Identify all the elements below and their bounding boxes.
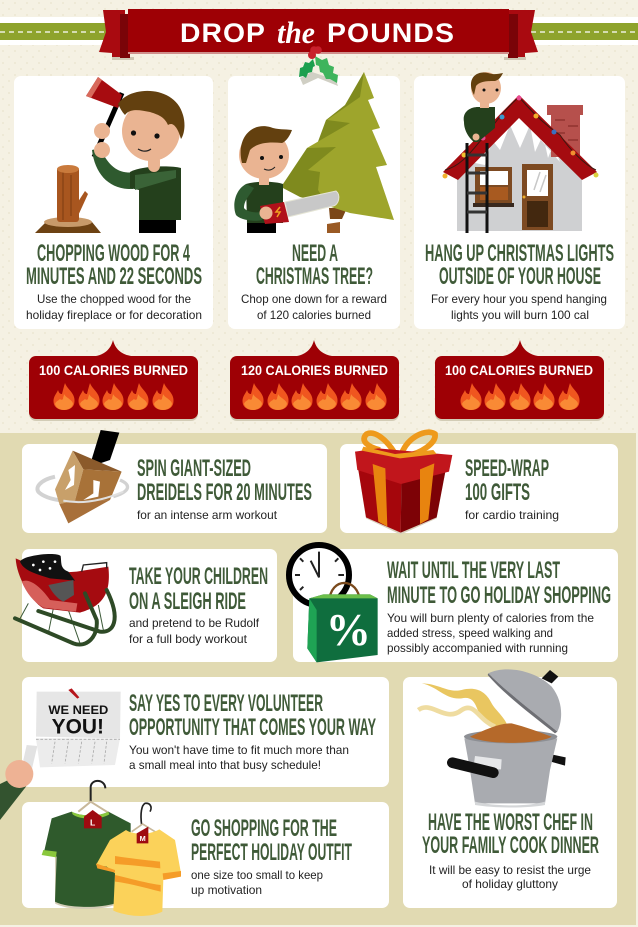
description: a small meal into that busy schedule! bbox=[129, 758, 321, 772]
card: christmas tree bbox=[228, 72, 400, 329]
card: chopping wood bbox=[14, 76, 213, 329]
description bbox=[191, 868, 323, 897]
heading: TAKE YOUR CHILDREN bbox=[129, 563, 268, 590]
heading: SAY YES TO EVERY VOLUNTEER bbox=[129, 690, 323, 717]
description: possibly accompanied with running bbox=[387, 641, 568, 655]
heading: PERFECT HOLIDAY OUTFIT bbox=[191, 839, 352, 866]
icon: cooking pot bbox=[418, 669, 566, 807]
flames bbox=[460, 383, 580, 410]
heading: GO SHOPPING FOR THE bbox=[191, 815, 337, 842]
heading: SPEED-WRAP bbox=[465, 455, 549, 482]
description: Chop one down for a reward bbox=[241, 292, 387, 306]
icon: we need you poster bbox=[0, 688, 121, 820]
icon: sleigh bbox=[15, 554, 115, 644]
heading: ON A SLEIGH RIDE bbox=[129, 588, 246, 615]
title text: DROP bbox=[180, 18, 266, 48]
description: lights you will burn 100 cal bbox=[451, 308, 589, 322]
icon: man with chainsaw and tree bbox=[234, 72, 394, 233]
title ribbon bbox=[99, 9, 538, 60]
description: It will be easy to resist the urge bbox=[429, 863, 591, 877]
icon: dreidel bbox=[37, 430, 128, 523]
heading: NEED A bbox=[292, 240, 338, 267]
heading bbox=[256, 240, 373, 290]
description: of holiday gluttony bbox=[462, 877, 558, 891]
heading: CHRISTMAS TREE? bbox=[256, 263, 373, 290]
card: holiday outfit bbox=[22, 781, 389, 916]
heading bbox=[129, 563, 268, 615]
title text: POUNDS bbox=[327, 18, 455, 48]
icon: holly bbox=[299, 46, 338, 86]
description: for an intense arm workout bbox=[137, 508, 278, 522]
description: and pretend to be Rudolf bbox=[129, 616, 260, 630]
description: You won't have time to fit much more than bbox=[129, 743, 349, 757]
icon: shirts on hangers: M bbox=[140, 834, 146, 843]
icon: gift bbox=[355, 432, 452, 535]
card: sleigh bbox=[15, 549, 277, 662]
card: last minute shopping bbox=[289, 545, 618, 662]
description bbox=[431, 292, 607, 322]
calorie badge: 100 lights: 100 CALORIES BURNED bbox=[445, 362, 593, 378]
card: christmas lights bbox=[414, 72, 625, 329]
icon: we need you poster: WE NEED bbox=[48, 703, 108, 717]
heading bbox=[26, 240, 202, 290]
flames bbox=[242, 383, 387, 410]
description: of 120 calories burned bbox=[257, 308, 371, 322]
description: For every hour you spend hanging bbox=[431, 292, 607, 306]
lower beige background bbox=[0, 433, 636, 925]
heading: MINUTES AND 22 SECONDS bbox=[26, 263, 202, 290]
calorie badge: 100 wood: 100 CALORIES BURNED bbox=[39, 362, 188, 378]
heading: DREIDELS FOR 20 MINUTES bbox=[137, 479, 312, 506]
icon: house with lights bbox=[442, 72, 598, 233]
title text bbox=[180, 15, 455, 50]
description bbox=[429, 863, 591, 891]
calorie badge: 120 tree bbox=[230, 340, 399, 421]
heading: 100 GIFTS bbox=[465, 479, 530, 506]
heading bbox=[425, 240, 614, 290]
description: for a full body workout bbox=[129, 632, 248, 646]
icon: shirts on hangers: L bbox=[90, 818, 96, 828]
calorie badge: 120 tree: 120 CALORIES BURNED bbox=[241, 362, 388, 378]
flames bbox=[54, 383, 174, 410]
description: Use the chopped wood for the bbox=[37, 292, 191, 306]
description: one size too small to keep bbox=[191, 868, 323, 882]
calorie badge: 100 lights bbox=[435, 340, 604, 421]
heading bbox=[465, 455, 549, 506]
icon: woodcutter bbox=[35, 77, 184, 233]
title text: the bbox=[277, 15, 315, 50]
card: dreidels bbox=[22, 430, 327, 533]
icon: we need you poster: YOU! bbox=[52, 714, 104, 738]
description bbox=[387, 611, 594, 655]
heading bbox=[422, 809, 599, 859]
description: up motivation bbox=[191, 883, 262, 897]
heading bbox=[191, 815, 352, 866]
card: volunteer bbox=[0, 677, 389, 820]
heading: SPIN GIANT-SIZED bbox=[137, 455, 251, 482]
heading bbox=[137, 455, 312, 506]
card: gifts bbox=[340, 432, 618, 535]
description bbox=[129, 616, 260, 646]
description: You will burn plenty of calories from the bbox=[387, 611, 594, 625]
icon: shirts on hangers bbox=[42, 781, 181, 916]
description bbox=[241, 292, 387, 322]
description bbox=[26, 292, 202, 322]
description: added stress, speed walking and bbox=[387, 626, 553, 640]
heading bbox=[129, 690, 376, 741]
heading: CHOPPING WOOD FOR 4 bbox=[37, 240, 190, 267]
description: for cardio training bbox=[465, 508, 559, 522]
heading: OPPORTUNITY THAT COMES YOUR WAY bbox=[129, 714, 376, 741]
icon: clock and shopping bag bbox=[289, 545, 378, 662]
icon: clock and shopping bag: % bbox=[326, 605, 371, 655]
calorie badge: 100 wood bbox=[29, 340, 198, 421]
description bbox=[129, 743, 349, 772]
card: worst chef bbox=[403, 669, 617, 908]
heading bbox=[387, 557, 611, 609]
header stripe bbox=[0, 17, 638, 45]
description: holiday fireplace or for decoration bbox=[26, 308, 202, 322]
